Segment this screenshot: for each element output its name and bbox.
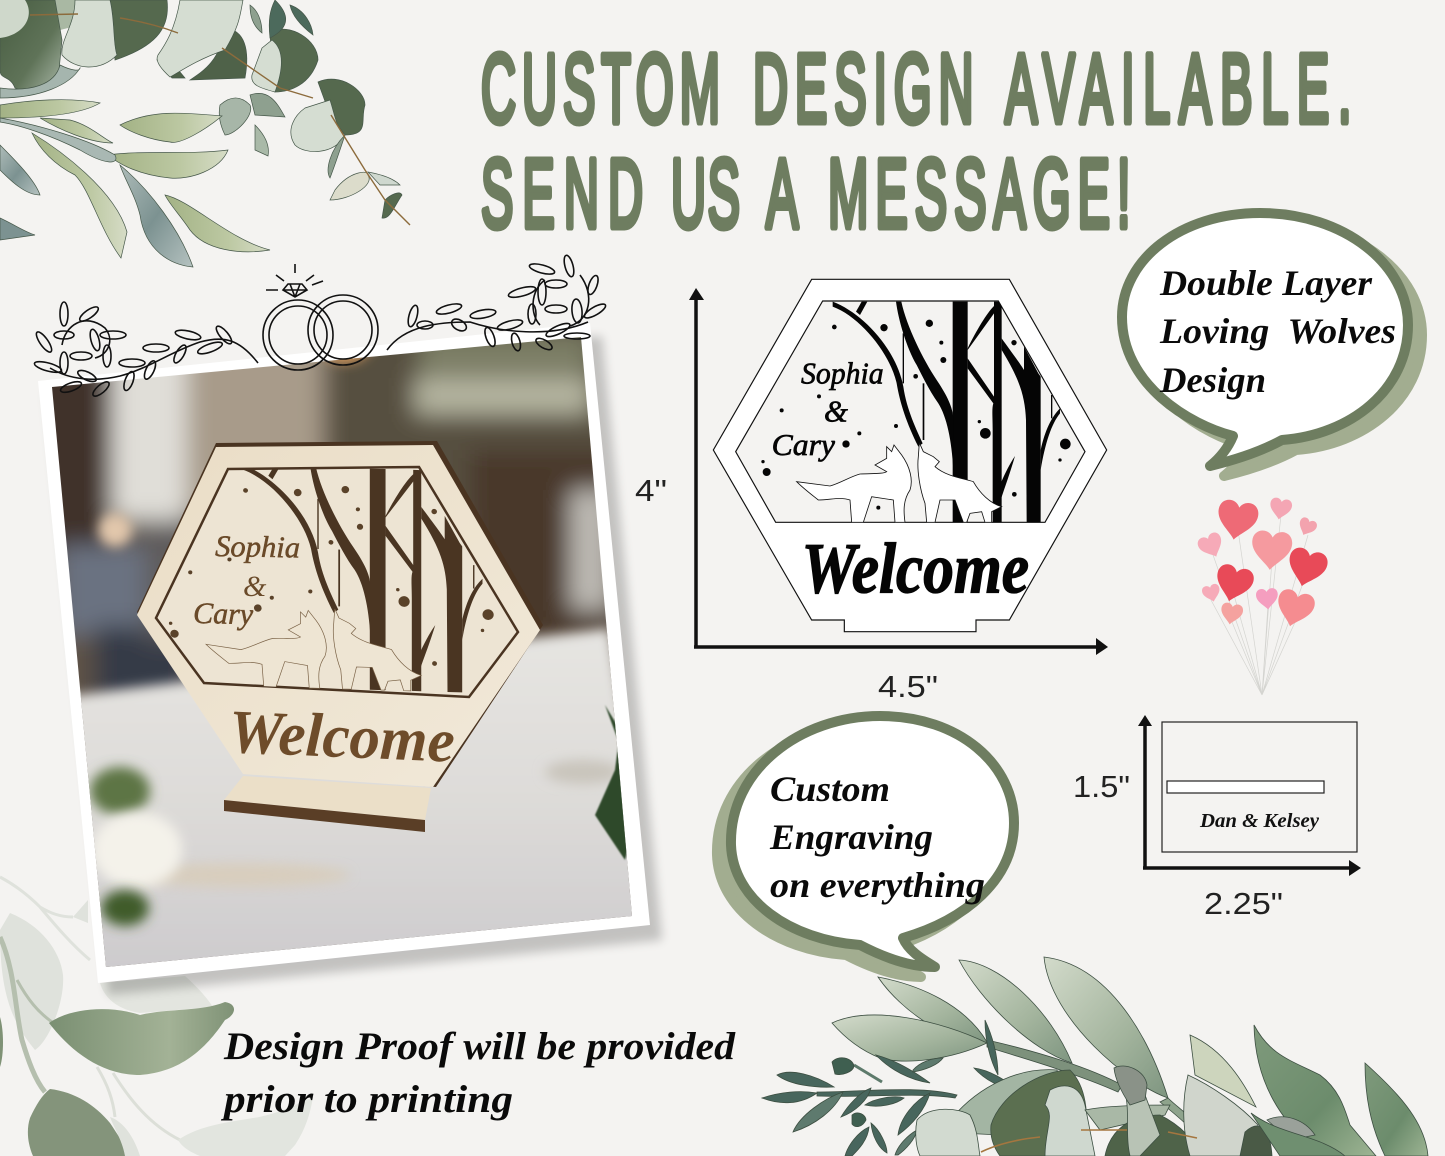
speech bubble: double layer: Loving Wolves [1159,311,1396,351]
right green leaves [1254,1025,1376,1156]
card slot [1167,781,1324,793]
hexagon drawing: & [824,395,848,429]
speech bubble: custom engraving: on everything [770,865,985,905]
wooden welcome sign in photo: Cary [193,597,254,631]
title: CUSTOM [481,36,720,144]
foliage: bottom-right corner [762,957,1428,1156]
axes [689,288,1108,655]
title: DESIGN [753,36,974,144]
eucalyptus cluster [952,1070,1070,1135]
height label: 4" [635,473,667,508]
hexagon drawing: Sophia [801,356,884,390]
card outline [1162,722,1357,852]
title: SEND [481,141,643,249]
footer note [221,1025,736,1121]
hexagon drawing: Cary [772,428,835,462]
dimension diagram: name card [1073,715,1361,921]
wooden welcome sign in photo: Sophia [215,530,300,564]
small dark sprig [762,1020,1018,1156]
icon: left vine [33,302,258,398]
wooden welcome sign in photo: & [243,570,267,603]
card name: Dan & Kelsey [1199,810,1319,832]
title: AVAILABLE. [1005,36,1352,144]
foliage: bottom-left corner [0,877,313,1156]
dimension diagram: hexagon sign [635,279,1108,704]
wooden welcome sign in photo: Welcome [227,698,456,776]
wooden welcome sign in photo [137,441,543,832]
foliage: top-left corner [0,0,410,267]
axes [1138,715,1361,876]
icon: right vine [387,254,607,352]
title: A [766,141,798,249]
card height label: 1.5" [1073,769,1130,804]
hexagon drawing: Welcome [802,529,1029,609]
wedding rings and vine line art [33,254,607,398]
title [481,36,1352,249]
speech bubble: double layer: Double Layer [1159,263,1373,303]
title: US [671,141,740,249]
icon: wedding rings [263,264,378,370]
footer note: prior to printing [221,1078,513,1121]
speech bubble: double layer: Design [1159,360,1266,400]
speech bubble: custom engraving [717,716,1014,977]
hexagon drawing [713,279,1107,632]
width label: 4.5" [878,669,938,704]
icon: heart balloons [1196,497,1330,695]
footer note: Design Proof will be provided [223,1025,736,1068]
panel: framed product photo [20,310,662,1010]
speech bubble: double layer [1122,213,1422,476]
card width label: 2.25" [1204,886,1283,921]
blurred photo background [52,337,632,967]
title: MESSAGE! [828,141,1130,249]
speech bubble: custom engraving: Engraving [769,817,933,857]
speech bubble: custom engraving: Custom [770,769,890,809]
